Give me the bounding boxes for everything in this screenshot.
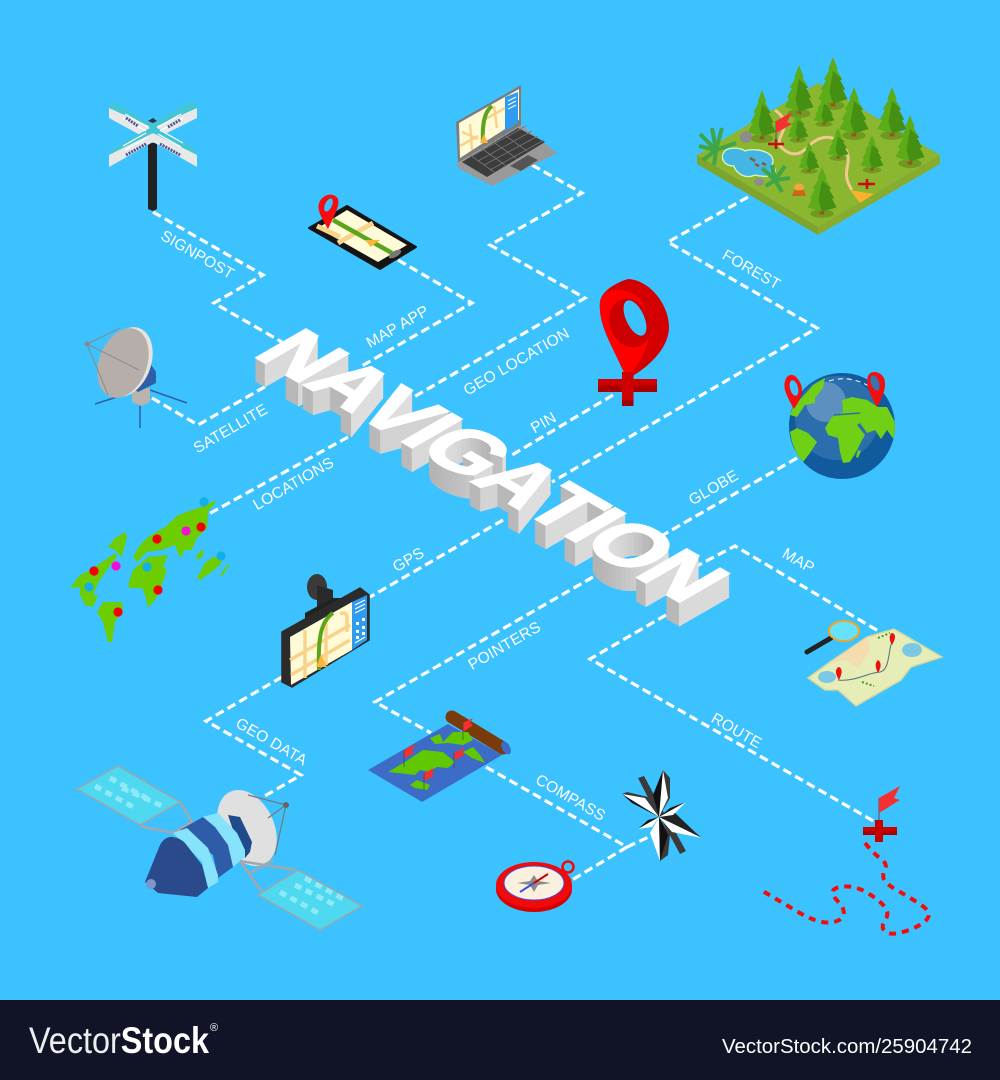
footer bar: VectorStock.com/25904742 bbox=[722, 1036, 972, 1058]
label: gps: GPS bbox=[390, 544, 427, 576]
label: map: MAP bbox=[779, 545, 817, 577]
dashed connector lines bbox=[152, 165, 880, 880]
title: NAVIGATION: NAVIGATION bbox=[235, 317, 748, 613]
label: geo data: GEO DATA bbox=[233, 715, 310, 770]
icon: world map with location dots bbox=[70, 497, 229, 642]
label: forest: FOREST bbox=[719, 247, 784, 294]
icon: folded map with magnifier bbox=[807, 621, 942, 706]
icon: large red pin bbox=[598, 279, 669, 406]
icon: rolled world map bbox=[368, 717, 513, 802]
icon: compass rose bbox=[622, 770, 702, 861]
label: locations: LOCATIONS bbox=[250, 454, 337, 514]
icon: laptop bbox=[456, 85, 557, 186]
icon: globe with pins bbox=[784, 372, 895, 479]
label: satellite: SATELLITE bbox=[191, 401, 271, 457]
icon: signpost bbox=[109, 100, 197, 211]
footer bar: VectorStock bbox=[29, 1020, 209, 1061]
footer bar bbox=[0, 1000, 1000, 1080]
icon: orbital satellite bbox=[77, 766, 362, 930]
label: compass: COMPASS bbox=[532, 771, 608, 825]
icon: red compass bbox=[496, 862, 574, 912]
label: geo location: GEO LOCATION bbox=[461, 325, 573, 399]
label: globe: GLOBE bbox=[686, 467, 742, 509]
icon: route with flag and red dashes bbox=[761, 786, 929, 934]
label: map app: MAP APP bbox=[364, 302, 432, 352]
icon: GPS navigator bbox=[282, 574, 369, 687]
footer bar: ® bbox=[210, 1022, 218, 1034]
label: pin: PIN bbox=[528, 409, 559, 437]
icon: map app phone bbox=[309, 195, 416, 269]
icon: satellite dish bbox=[84, 320, 187, 428]
label: route: ROUTE bbox=[708, 710, 764, 752]
label: signpost: SIGNPOST bbox=[158, 227, 237, 283]
icon: forest tile bbox=[697, 57, 940, 235]
label: pointers: POINTERS bbox=[465, 619, 544, 674]
